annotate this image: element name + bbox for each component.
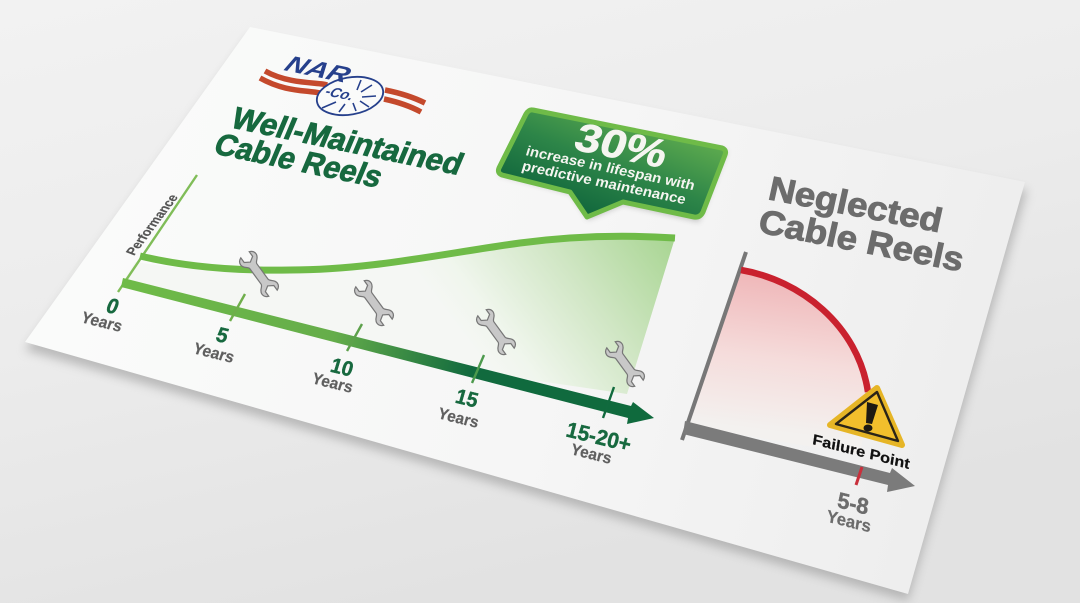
- title: Neglected Cable Reels: Cable Reels: [755, 203, 967, 279]
- label: 5 years: 5: [213, 323, 232, 348]
- failure y axis: [682, 252, 746, 440]
- title: Well-Maintained Cable Reels: Well-Maintained: [226, 102, 468, 182]
- y axis label: Performance: [123, 192, 181, 257]
- area under failure curve: [685, 270, 870, 455]
- logo: NARCo: NAR: [280, 51, 356, 88]
- label: 15-20+ years: Years: [569, 441, 613, 468]
- label: failure point: Failure Point: [811, 432, 911, 473]
- callout: 30% lifespan increase: predictive maintenance: [520, 158, 688, 207]
- label: 15 years: [436, 386, 481, 432]
- failure tick: [856, 467, 862, 485]
- failure curve: [741, 270, 868, 392]
- label: 10 years: Years: [310, 370, 355, 397]
- callout: 30% lifespan increase: 30%: [569, 116, 674, 177]
- label: 5 years: [191, 323, 237, 367]
- title: Neglected Cable Reels: Neglected: [765, 170, 946, 240]
- logo: NARCo: -Co.: [323, 84, 357, 103]
- label: 5-8 years: Years: [825, 507, 872, 536]
- label: 5-8 years: 5-8: [836, 487, 870, 520]
- icon: wrench at 5 years: [237, 249, 281, 299]
- label: 5-8 years: [825, 487, 872, 536]
- icon: wrench at 15 years: [474, 307, 518, 357]
- callout: 30% lifespan increase: [498, 110, 727, 222]
- timeline arrow: [121, 278, 654, 424]
- logo: NARCo: [260, 51, 425, 120]
- y axis: [118, 175, 197, 292]
- icon: wrench at 20 years: [603, 339, 647, 389]
- area under performance curve: [123, 237, 675, 394]
- title: Neglected Cable Reels: [755, 170, 967, 279]
- performance curve: [140, 236, 675, 270]
- label: 0 years: [79, 294, 125, 336]
- failure timeline arrow: [683, 421, 915, 492]
- label: 0 years: Years: [79, 309, 125, 336]
- label: 15-20+ years: 15-20+: [564, 417, 634, 457]
- title: Well-Maintained Cable Reels: Cable Reels: [209, 128, 388, 194]
- label: 10 years: [310, 355, 356, 397]
- label: 15 years: Years: [436, 405, 481, 432]
- label: 0 years: 0: [103, 294, 122, 319]
- icon: wrench at 10 years: [352, 278, 396, 328]
- label: 5 years: Years: [191, 340, 237, 367]
- icon: warning triangle: [830, 388, 902, 445]
- label: 10 years: 10: [328, 355, 356, 382]
- label: 15 years: 15: [453, 386, 480, 413]
- callout: 30% lifespan increase: increase in lifespan with: [524, 143, 697, 193]
